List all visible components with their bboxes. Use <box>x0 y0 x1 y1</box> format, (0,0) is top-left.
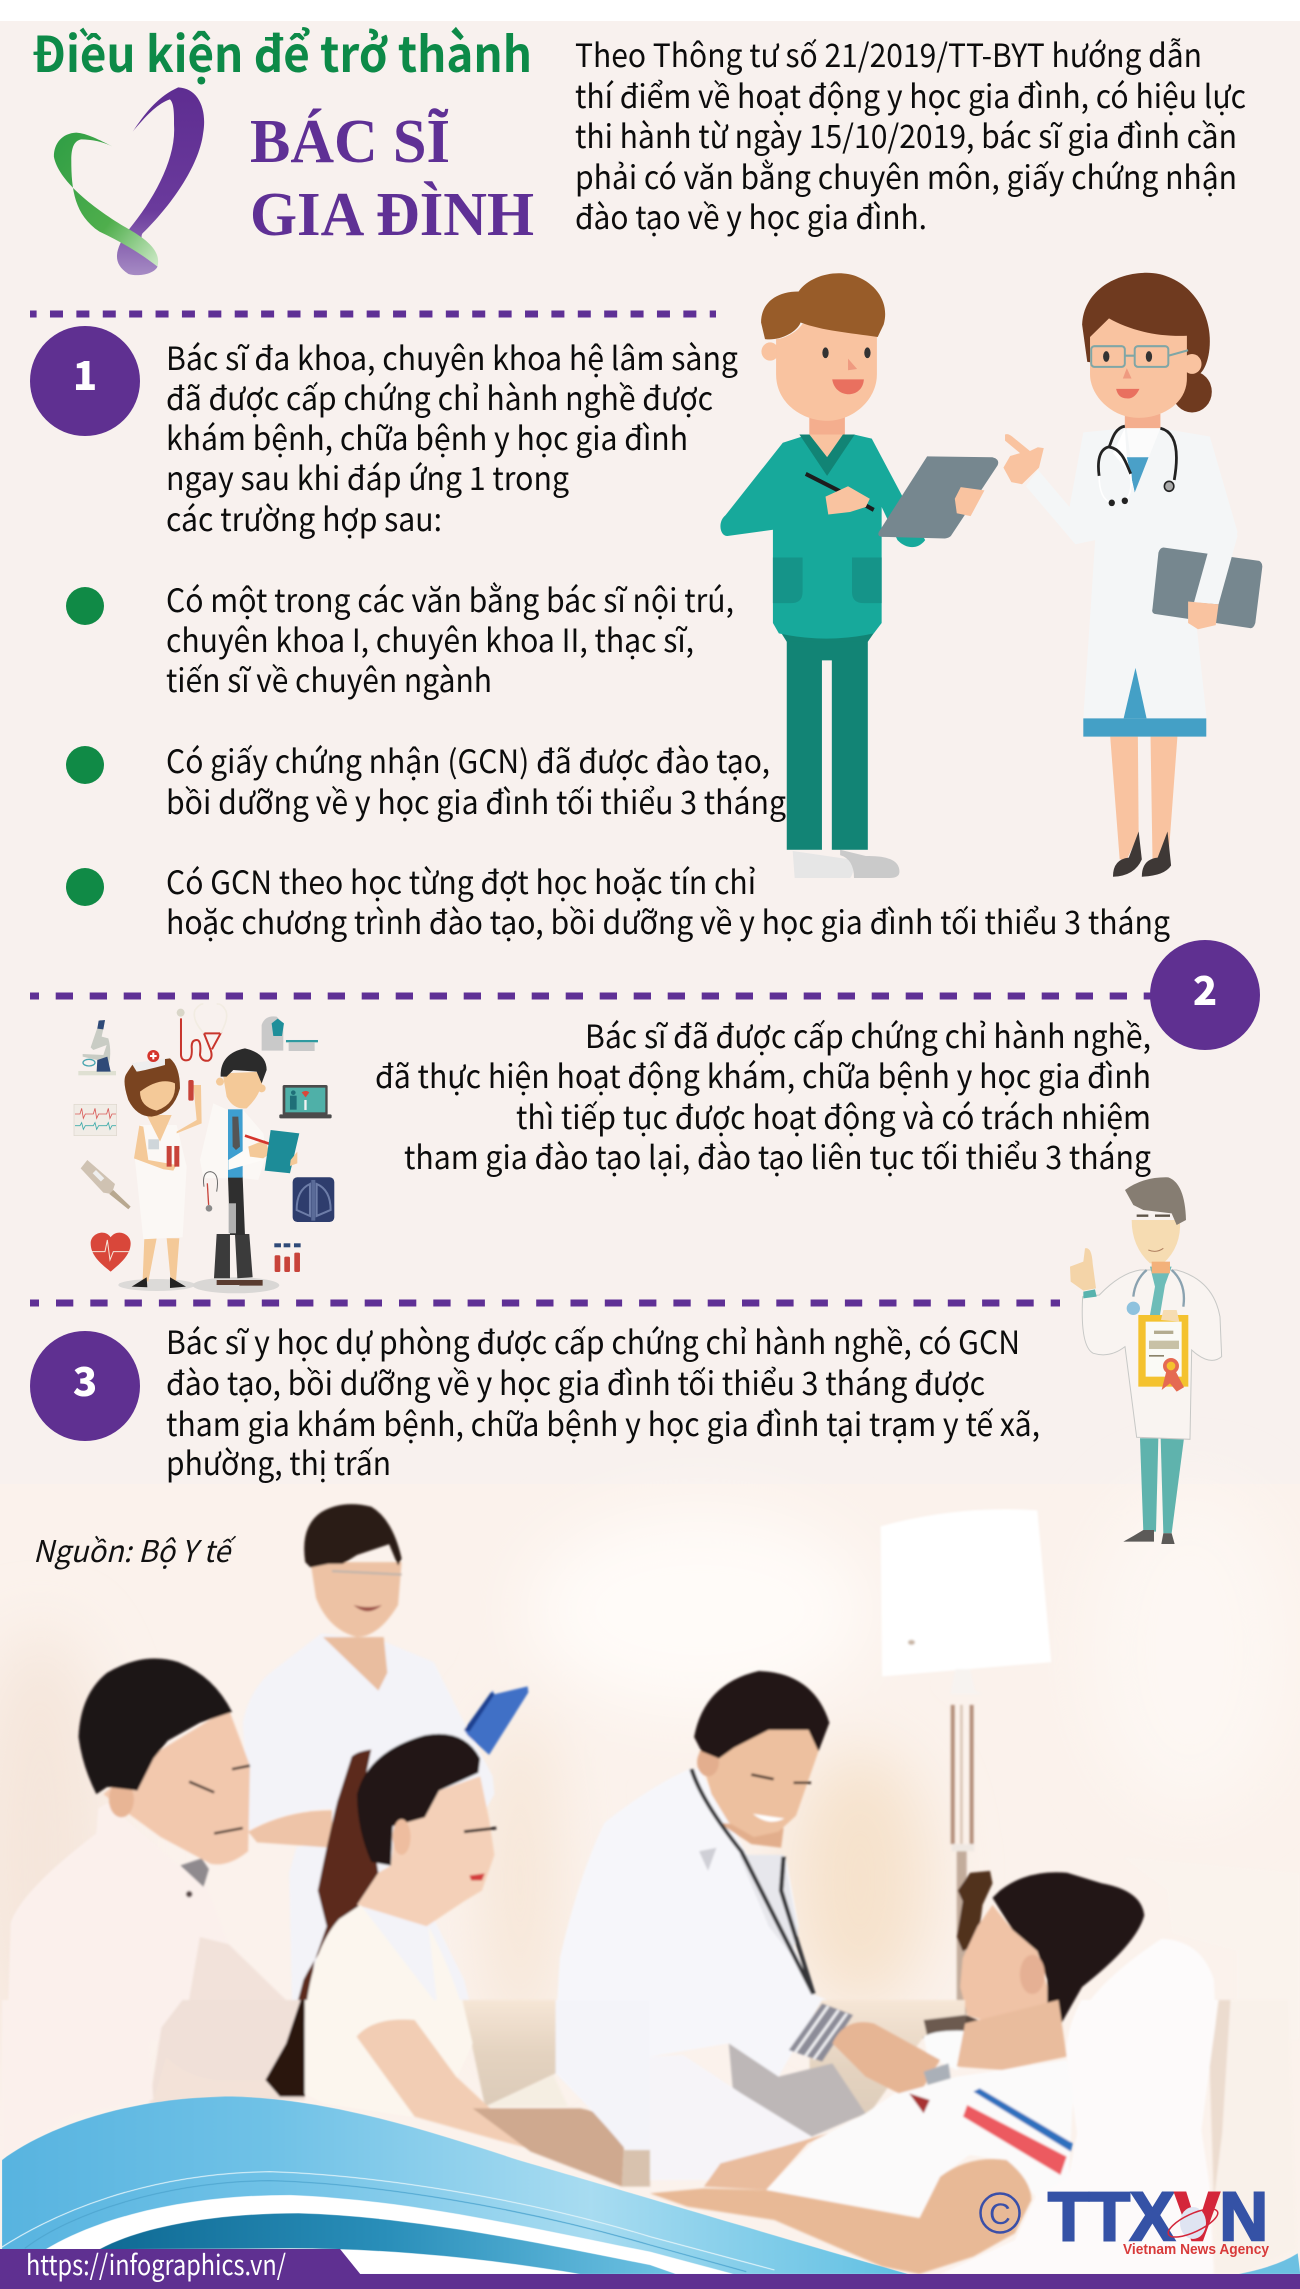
icon: laptop monitor <box>279 1085 332 1118</box>
intro text: thi hành từ ngày 15/10/2019, bác sĩ gia đình cần <box>575 112 1237 158</box>
badge 3 <box>30 1331 140 1441</box>
text: condition 2: Bác sĩ đã được cấp chứng chỉ hành nghề, <box>585 1012 1151 1058</box>
text: condition 1 <box>166 334 738 541</box>
illustration: female doctor <box>1003 273 1262 877</box>
doctor figure <box>200 1048 299 1286</box>
illustration: medical team with icons <box>74 1004 334 1293</box>
logo: TTXVN: C <box>989 2198 1011 2231</box>
bullet: option a: Có một trong các văn bằng bác sĩ nội trú, <box>166 576 734 622</box>
badge 2: 2 <box>1193 959 1217 1017</box>
icon: test tubes <box>274 1243 301 1272</box>
text: condition 3 <box>166 1318 1040 1485</box>
intro text <box>575 31 1246 239</box>
text: condition 1: khám bệnh, chữa bệnh y học gia đình <box>166 414 688 460</box>
icon: MRI scanner <box>262 1016 318 1051</box>
bullet: option c: hoặc chương trình đào tạo, bồi dưỡng về y học gia đình tối thiểu 3 tháng <box>166 898 1170 944</box>
footer bar: https://infographics.vn/ <box>26 2244 286 2284</box>
bullet: option b: bồi dưỡng về y học gia đình tối thiểu 3 tháng <box>166 778 786 824</box>
text: condition 2: đã thực hiện hoạt động khám, chữa bệnh y học gia đình <box>375 1052 1151 1098</box>
text: condition 3: đào tạo, bồi dưỡng về y học gia đình tối thiểu 3 tháng được <box>166 1359 985 1405</box>
intro text: Theo Thông tư số 21/2019/TT-BYT hướng dẫn <box>575 31 1202 77</box>
text: condition 2: tham gia đào tạo lại, đào tạo liên tục tối thiểu 3 tháng <box>404 1133 1151 1179</box>
text: condition 1: ngay sau khi đáp ứng 1 trong <box>166 454 569 500</box>
intro text: thí điểm về hoạt động y học gia đình, có hiệu lực <box>575 72 1246 118</box>
source note: Nguồn: Bộ Y tế <box>33 1527 236 1571</box>
bullet: option b <box>66 737 786 824</box>
lower right portion <box>650 2000 1297 2274</box>
text: condition 2: thì tiếp tục được hoạt động và có trách nhiệm <box>516 1093 1151 1139</box>
left portion: nurse, man, woman <box>7 1504 528 2040</box>
icon: thermometer <box>81 1160 131 1209</box>
title line: Điều kiện để trở thành <box>32 16 532 87</box>
illustration: doctor with certificate <box>1070 1177 1222 1544</box>
text: condition 3: phường, thị trấn <box>166 1439 391 1485</box>
icon: red stethoscope <box>177 1004 227 1061</box>
bottom wave <box>0 2097 1300 2274</box>
right portion: lamp, doctor, patient head <box>555 1509 1300 2040</box>
badge 1 <box>30 326 140 436</box>
bullet: option a <box>66 576 734 702</box>
badge 1: 1 <box>73 344 97 402</box>
bullet: option c: Có GCN theo học từng đợt học hoặc tín chỉ <box>166 858 756 904</box>
bullet: option b: Có giấy chứng nhận (GCN) đã được đào tạo, <box>166 737 770 783</box>
icon: ECG chart <box>74 1104 117 1136</box>
intro text: đào tạo về y học gia đình. <box>575 193 927 239</box>
illustration: male doctor in scrubs <box>720 273 998 878</box>
bullet: option a: chuyên khoa I, chuyên khoa II, thạc sĩ, <box>166 616 694 662</box>
heading: BÁC SĨ GIA ĐÌNH <box>250 108 534 249</box>
logo: TTXVN: Vietnam News Agency <box>1123 2241 1270 2258</box>
heading: BÁC SĨ GIA ĐÌNH: GIA ĐÌNH <box>250 181 534 249</box>
icon: microscope <box>78 1020 116 1075</box>
footer bar <box>0 2244 1300 2289</box>
text: condition 3: Bác sĩ y học dự phòng được cấp chứng chỉ hành nghề, có GCN <box>166 1318 1020 1364</box>
text: condition 1: Bác sĩ đa khoa, chuyên khoa hệ lâm sàng <box>166 334 738 380</box>
icon: heart logo <box>54 87 204 275</box>
intro text: phải có văn bằng chuyên môn, giấy chứng nhận <box>575 153 1237 199</box>
icon: chest x-ray <box>293 1177 334 1222</box>
heading: BÁC SĨ GIA ĐÌNH: BÁC SĨ <box>250 108 450 176</box>
text: condition 1: đã được cấp chứng chỉ hành nghề được <box>166 374 713 420</box>
nurse figure <box>125 1050 202 1288</box>
floor shadows <box>118 1277 279 1293</box>
badge 3: 3 <box>73 1350 97 1408</box>
text: condition 3: tham gia khám bệnh, chữa bệnh y học gia đình tại trạm y tế xã, <box>166 1400 1040 1446</box>
photo: family doctor visit <box>0 1484 1300 2274</box>
text: condition 2 <box>375 1012 1151 1179</box>
bullet: option c <box>66 858 1170 944</box>
logo: TTXVN: TTXVN <box>1048 2178 1268 2255</box>
icon: heart <box>91 1233 131 1272</box>
top white band <box>0 0 1300 21</box>
lower left portion <box>2 2000 650 2187</box>
bullet: option a: tiến sĩ về chuyên ngành <box>166 656 492 702</box>
text: condition 1: các trường hợp sau: <box>166 495 442 541</box>
badge 2 <box>1150 940 1260 1050</box>
